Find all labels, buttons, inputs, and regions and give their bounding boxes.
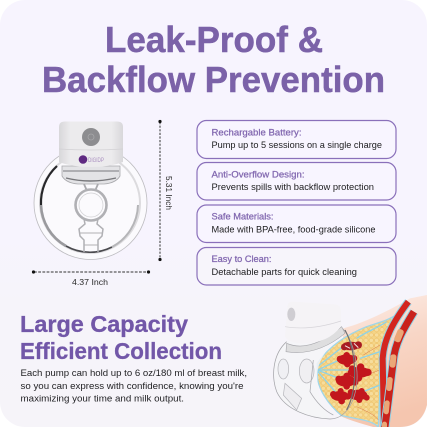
card: easy to clean <box>197 248 396 285</box>
card: anti-overflow design: Prevents spills with backflow protection <box>212 182 374 192</box>
body paragraph: maximizing your time and milk output. <box>20 394 184 404</box>
card: rechargeable battery: Rechargable Battery: <box>212 128 302 138</box>
flange <box>34 146 147 260</box>
product image: breast pump front view <box>34 122 147 260</box>
collection cup left body <box>274 335 340 419</box>
body paragraph: so you can express with confidence, knowing you're <box>20 381 243 391</box>
card: easy to clean: Easy to Clean: <box>212 254 272 264</box>
body paragraph <box>20 368 247 404</box>
head <box>285 302 341 343</box>
collection cup outline <box>274 327 357 419</box>
card: safe materials: Safe Materials: <box>212 212 274 222</box>
blood vessels <box>357 345 380 420</box>
card: safe materials: Made with BPA-free, food-grade silicone <box>212 224 376 234</box>
motor head <box>59 122 123 167</box>
vessel segments <box>382 328 405 427</box>
skin <box>340 295 427 427</box>
width dimension: 4.37 Inch <box>72 277 108 287</box>
title: Backflow Prevention <box>42 59 385 100</box>
card: rechargeable battery: Pump up to 5 sessions on a single charge <box>212 140 382 150</box>
brand logo: DIGIDP <box>88 158 104 164</box>
white speckles on top lobe <box>345 343 358 348</box>
title: Leak-Proof & <box>105 19 323 60</box>
subheading: Large Capacity <box>20 311 188 337</box>
height dimension <box>158 120 174 261</box>
card: easy to clean: Detachable parts for quick cleaning <box>212 267 357 277</box>
mammary lobes <box>330 341 372 404</box>
card: anti-overflow design <box>197 162 396 200</box>
card: anti-overflow design: Anti-Overflow Design: <box>212 170 304 180</box>
height dimension: 5.31 Inch <box>164 176 174 210</box>
milk ducts <box>317 322 387 393</box>
collar <box>286 327 345 353</box>
subheading: Efficient Collection <box>20 338 222 364</box>
width dimension <box>32 270 150 287</box>
cup inner parts <box>278 330 355 415</box>
card: safe materials <box>197 205 396 242</box>
neck and collar <box>62 166 120 191</box>
title <box>42 19 385 100</box>
body paragraph: Each pump can hold up to 6 oz/180 ml of breast milk, <box>20 368 247 378</box>
card: rechargeable battery <box>197 120 396 158</box>
illustration: pump on breast anatomy <box>274 295 427 427</box>
milk valve ring <box>76 190 106 252</box>
subheading <box>20 311 222 364</box>
artery and vein <box>383 302 414 427</box>
breast fat tissue <box>317 313 398 427</box>
power button <box>82 128 100 146</box>
